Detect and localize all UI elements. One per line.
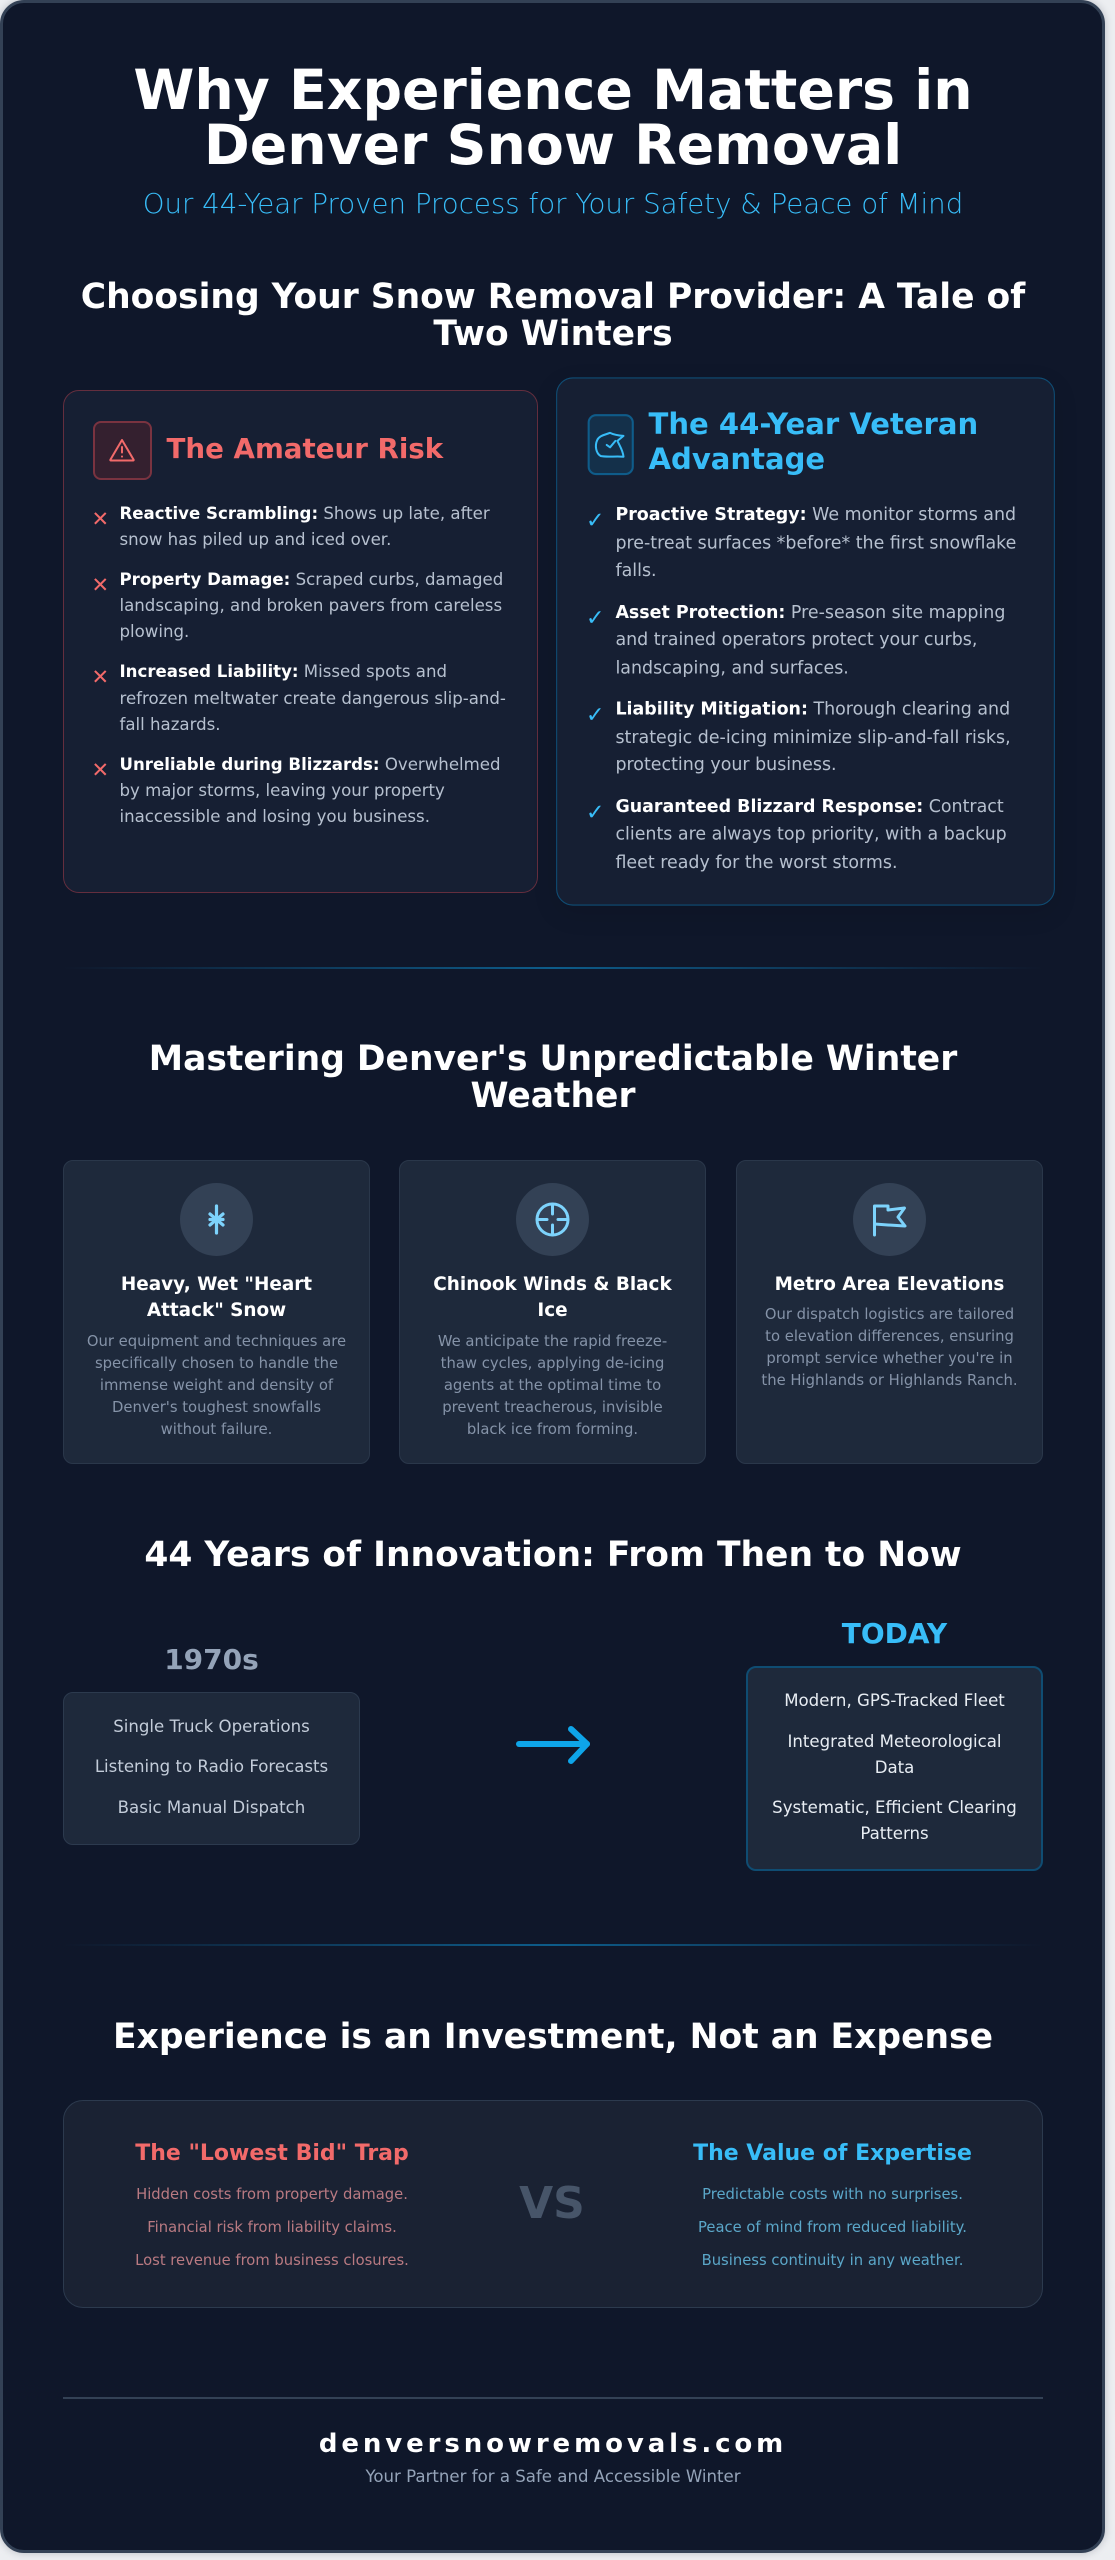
panel: the 44-year veteran advantage: ✓ bbox=[586, 702, 605, 727]
panel: the 44-year veteran advantage: ✓ bbox=[586, 799, 605, 824]
comparison item: Business continuity in any weather. bbox=[702, 2252, 963, 2268]
list item: property damage bbox=[92, 570, 503, 641]
list item: unreliable during blizzards: inaccessible and losing you business. bbox=[120, 807, 430, 826]
panel: the amateur risk: ✕ bbox=[92, 506, 109, 530]
column: lowest bid trap bbox=[135, 2140, 409, 2268]
list item: increased liability: refrozen meltwater create dangerous slip-and- bbox=[120, 689, 506, 708]
card description: to elevation differences, ensuring bbox=[765, 1328, 1014, 1345]
title bbox=[133, 58, 973, 178]
panel heading: Advantage bbox=[649, 442, 825, 477]
comparison item: Lost revenue from business closures. bbox=[135, 2252, 409, 2268]
list item: unreliable during blizzards: by major storms, leaving your property bbox=[120, 781, 445, 800]
card description: black ice from forming. bbox=[467, 1420, 638, 1438]
card title: Metro Area Elevations bbox=[775, 1274, 1004, 1295]
list item: guaranteed blizzard response: clients are always top priority, with a backup bbox=[615, 824, 1007, 844]
footer website: denversnowremovals.com bbox=[319, 2428, 787, 2458]
list item: guaranteed blizzard response bbox=[586, 796, 1007, 872]
list item: increased liability: fall hazards. bbox=[120, 715, 221, 734]
veteran advantage list bbox=[586, 505, 1016, 872]
card description: specifically chosen to handle the bbox=[95, 1354, 338, 1372]
card: metro area elevations bbox=[736, 1160, 1043, 1464]
timeline item: Systematic, Efficient Clearing bbox=[772, 1798, 1017, 1816]
card title: Heavy, Wet "Heart bbox=[121, 1274, 312, 1295]
list item: proactive strategy: falls. bbox=[615, 560, 657, 580]
list item: reactive scrambling: Reactive Scrambling: Shows up late, after bbox=[120, 504, 490, 522]
card description: prompt service whether you're in bbox=[766, 1350, 1013, 1367]
list item: reactive scrambling bbox=[92, 504, 490, 549]
title: Why Experience Matters in bbox=[133, 58, 973, 122]
list item: unreliable during blizzards: Unreliable during Blizzards: Overwhelmed bbox=[120, 755, 501, 774]
panel: the amateur risk bbox=[63, 390, 538, 893]
panel heading: The 44-Year Veteran bbox=[649, 407, 978, 441]
card description: agents at the optimal time to bbox=[444, 1376, 661, 1394]
column heading: The "Lowest Bid" Trap bbox=[135, 2140, 409, 2166]
label: 1970s: 1970s bbox=[164, 1643, 259, 1676]
comparison item: Peace of mind from reduced liability. bbox=[698, 2218, 967, 2236]
list item: unreliable during blizzards bbox=[92, 755, 501, 826]
comparison item: Financial risk from liability claims. bbox=[147, 2218, 397, 2236]
panel: today's operations bbox=[746, 1666, 1043, 1871]
subtitle: Our 44-Year Proven Process for Your Safety & Peace of Mind bbox=[143, 186, 963, 220]
card description: thaw cycles, applying de-icing bbox=[441, 1354, 664, 1372]
card description bbox=[761, 1306, 1018, 1389]
heading: tale of two winters: Choosing Your Snow Removal Provider: A Tale of bbox=[81, 277, 1025, 317]
list item: liability mitigation: strategic de-icing minimize slip-and-fall risks, bbox=[615, 727, 1011, 747]
heading: years of innovation: 44 Years of Innovation: From Then to Now bbox=[144, 1535, 962, 1575]
card description: without failure. bbox=[161, 1420, 272, 1438]
card description: Our equipment and techniques are bbox=[87, 1332, 346, 1350]
list item: property damage: Property Damage: Scraped curbs, damaged bbox=[120, 570, 503, 589]
title: Denver Snow Removal bbox=[204, 114, 902, 178]
icon: veteran shield mark bbox=[587, 414, 633, 475]
panel: value comparison bbox=[63, 2100, 1043, 2308]
amateur risk list bbox=[92, 504, 506, 826]
timeline item: Single Truck Operations bbox=[113, 1717, 310, 1736]
panel: the amateur risk: ✕ bbox=[92, 573, 109, 597]
card title: Attack" Snow bbox=[147, 1300, 286, 1321]
comparison item: Hidden costs from property damage. bbox=[136, 2186, 408, 2202]
panel: the amateur risk: ✕ bbox=[92, 665, 109, 689]
card description: Denver's toughest snowfalls bbox=[112, 1398, 321, 1416]
icon: crosshair circle bbox=[516, 1182, 588, 1256]
heading: investment not expense: Experience is an Investment, Not an Expense bbox=[113, 2017, 993, 2057]
timeline item: Data bbox=[875, 1758, 914, 1776]
card description bbox=[87, 1332, 346, 1438]
list item: increased liability: Increased Liability: Missed spots and bbox=[120, 662, 447, 681]
footer tagline: Your Partner for a Safe and Accessible Winter bbox=[365, 2467, 741, 2486]
icon: flag bbox=[852, 1182, 926, 1256]
timeline item bbox=[772, 1798, 1017, 1842]
column: value of expertise bbox=[693, 2140, 972, 2268]
column heading: The Value of Expertise bbox=[693, 2140, 972, 2166]
card description: immense weight and density of bbox=[100, 1376, 333, 1394]
panel heading: The Amateur Risk bbox=[166, 432, 443, 465]
list item: proactive strategy bbox=[586, 505, 1016, 580]
card: chinook winds bbox=[399, 1160, 706, 1464]
heading: mastering denver weather: Mastering Denver's Unpredictable Winter bbox=[149, 1039, 957, 1079]
timeline item: Basic Manual Dispatch bbox=[118, 1798, 305, 1817]
list item: guaranteed blizzard response: Guaranteed Blizzard Response: Contract bbox=[615, 796, 1004, 816]
card title bbox=[121, 1274, 312, 1321]
list item: asset protection: Asset Protection: Pre-season site mapping bbox=[615, 602, 1005, 622]
panel: the 44-year veteran advantage: ✓ bbox=[586, 508, 605, 533]
list item: liability mitigation bbox=[586, 699, 1011, 774]
list item: asset protection: landscaping, and surfaces. bbox=[615, 657, 849, 677]
card title bbox=[433, 1274, 672, 1321]
panel: the 44-year veteran advantage bbox=[556, 377, 1055, 906]
heading: mastering denver weather: Weather bbox=[470, 1076, 635, 1116]
timeline item: Listening to Radio Forecasts bbox=[95, 1757, 328, 1776]
timeline item: Modern, GPS-Tracked Fleet bbox=[784, 1691, 1005, 1710]
label: today: TODAY bbox=[842, 1617, 947, 1650]
heading: tale of two winters: Two Winters bbox=[433, 314, 673, 354]
card title: Chinook Winds & Black bbox=[433, 1274, 672, 1295]
card description: We anticipate the rapid freeze- bbox=[438, 1332, 667, 1350]
list item: asset protection bbox=[586, 602, 1005, 677]
list item: guaranteed blizzard response: fleet ready for the worst storms. bbox=[615, 852, 897, 871]
card description: the Highlands or Highlands Ranch. bbox=[761, 1372, 1018, 1389]
timeline item: Patterns bbox=[860, 1824, 929, 1842]
panel: 1970s operations bbox=[63, 1692, 360, 1845]
panel: the 44-year veteran advantage: ✓ bbox=[586, 605, 605, 630]
card description: prevent treacherous, invisible bbox=[442, 1398, 663, 1416]
timeline item bbox=[788, 1732, 1002, 1776]
list item: property damage: plowing. bbox=[120, 622, 189, 641]
card description bbox=[438, 1332, 667, 1438]
heading: tale of two winters bbox=[81, 277, 1026, 354]
arrow: then to now bbox=[516, 1726, 590, 1764]
vs label: VS bbox=[519, 2178, 585, 2229]
list item: property damage: landscaping, and broken pavers from careless bbox=[120, 596, 502, 615]
list item: increased liability bbox=[92, 662, 506, 734]
heading: mastering denver weather bbox=[149, 1039, 958, 1116]
list item: proactive strategy: pre-treat surfaces *before* the first snowflake bbox=[615, 532, 1016, 552]
icon: warning triangle bbox=[92, 420, 152, 480]
icon: snowflake bbox=[180, 1182, 252, 1256]
panel: the amateur risk: ✕ bbox=[92, 758, 109, 782]
list item: liability mitigation: protecting your business. bbox=[615, 754, 837, 774]
card: heavy wet snow bbox=[63, 1160, 370, 1464]
card description: Our dispatch logistics are tailored bbox=[765, 1306, 1014, 1323]
list item: liability mitigation: Liability Mitigation: Thorough clearing and bbox=[615, 699, 1010, 719]
list item: asset protection: and trained operators protect your curbs, bbox=[615, 630, 977, 649]
comparison item: Predictable costs with no surprises. bbox=[702, 2186, 963, 2202]
timeline item: Integrated Meteorological bbox=[788, 1732, 1002, 1750]
list item: proactive strategy: Proactive Strategy: We monitor storms and bbox=[615, 505, 1016, 525]
list item: reactive scrambling: snow has piled up and iced over. bbox=[120, 530, 391, 549]
panel heading bbox=[648, 407, 978, 477]
card title: Ice bbox=[537, 1300, 568, 1321]
